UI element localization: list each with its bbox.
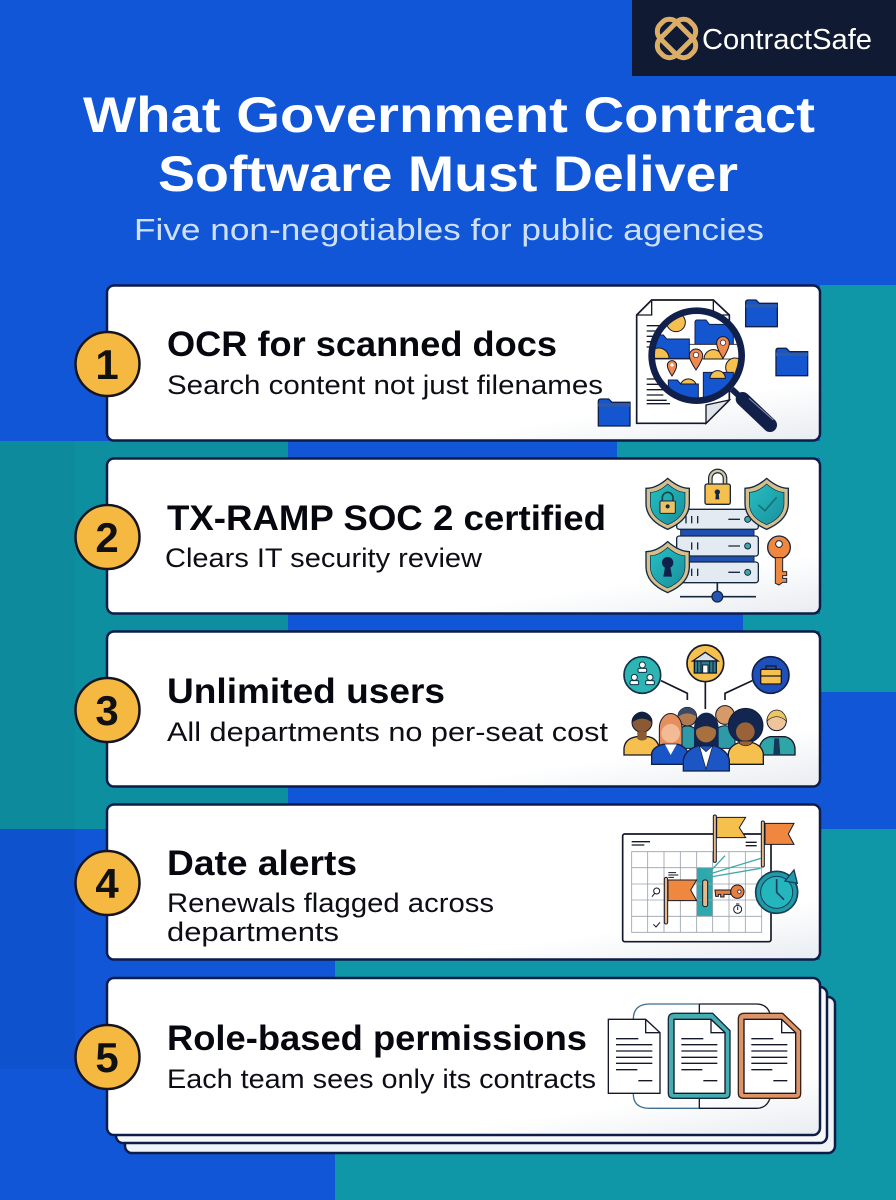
number badge 2: 2 — [95, 514, 119, 561]
front card — [107, 978, 820, 1135]
logo panel — [632, 0, 896, 76]
number badge 1: 1 — [95, 341, 119, 388]
heading 3: Unlimited users — [167, 672, 445, 711]
panel: 3 Unlimited users — [76, 632, 820, 786]
panel: 2 TX-RAMP SOC 2 certified — [76, 458, 820, 614]
number badge 4 — [76, 851, 140, 915]
stacked back sheet far — [125, 997, 835, 1153]
heading 2: TX-RAMP SOC 2 certified — [167, 499, 606, 538]
number badge 3: 3 — [95, 687, 119, 734]
heading 1: OCR for scanned docs — [167, 325, 557, 364]
description 5: Each team sees only its contracts — [167, 1064, 596, 1094]
icon: secure server with shields, padlock and key — [646, 471, 790, 602]
number badge 1 — [76, 332, 140, 396]
number badge 5 — [76, 1025, 140, 1089]
title: What Government Contract — [83, 87, 815, 143]
icon: calendar with flags, key and clock — [623, 815, 798, 942]
description 3: All departments no per-seat cost — [167, 717, 609, 747]
title: Software Must Deliver — [158, 146, 738, 202]
heading 5: Role-based permissions — [167, 1019, 587, 1058]
icon: three documents with access frames — [608, 1004, 801, 1108]
subtitle: Five non-negotiables for public agencies — [134, 212, 764, 247]
description 1: Search content not just filenames — [167, 370, 603, 400]
description 4: Renewals flagged across — [167, 888, 494, 918]
panel: 4 Date alerts — [76, 804, 820, 960]
number badge 2 — [76, 505, 140, 569]
number badge 5: 5 — [95, 1034, 119, 1081]
icon: diverse team connected to departments — [624, 645, 795, 771]
icon: magnifier over scanned document and folders — [598, 300, 808, 426]
number badge 4: 4 — [95, 860, 119, 907]
stacked back sheet near — [116, 987, 827, 1143]
description 2: Clears IT security review — [165, 543, 483, 573]
title — [83, 87, 815, 202]
panel: 1 OCR for scanned docs — [76, 286, 820, 440]
number badge 3 — [76, 678, 140, 742]
panel: 4 Date alerts: departments — [167, 917, 339, 947]
icon: ContractSafe knot logo — [653, 15, 700, 62]
panel: 5 Role-based permissions — [76, 978, 835, 1153]
brand name: ContractSafe — [702, 24, 872, 56]
heading 4: Date alerts — [167, 844, 357, 883]
